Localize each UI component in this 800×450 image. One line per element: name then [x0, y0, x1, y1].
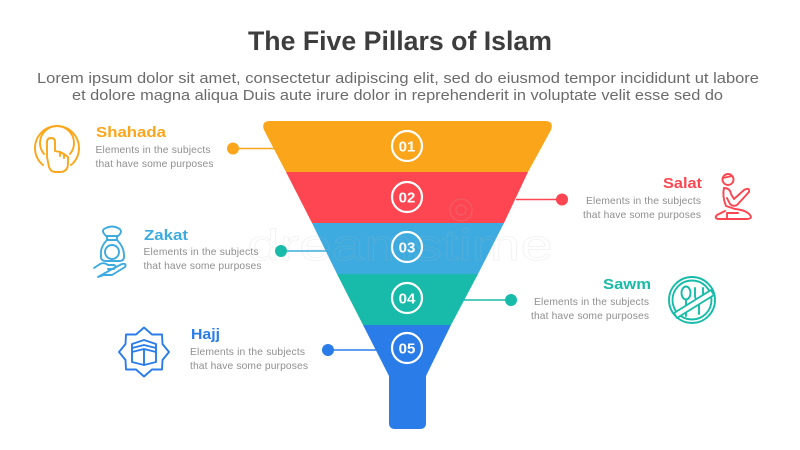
- watermark: dreamstime: [247, 221, 553, 270]
- number 03: 03: [399, 240, 415, 256]
- text: Sawm: Sawm: [603, 276, 651, 293]
- text: Shahada: Shahada: [96, 124, 167, 141]
- text: Sawm: [531, 276, 651, 322]
- funnel: [263, 121, 552, 429]
- number 02: [392, 182, 422, 212]
- connector: Sawm: [463, 294, 517, 306]
- funnel band 4: [337, 274, 478, 325]
- text: Hajj: [190, 326, 308, 372]
- text: Shahada: [96, 124, 214, 170]
- connector: Zakat: [275, 245, 326, 257]
- number 03: [392, 232, 422, 262]
- text: Shahada: Elements in the subjects: [96, 145, 210, 156]
- text: Zakat: that have some purposes: [144, 261, 262, 272]
- icon: Kaaba star: [119, 328, 169, 376]
- text: Hajj: Elements in the subjects: [190, 347, 305, 358]
- text: Hajj: Hajj: [191, 326, 220, 343]
- number 04: [392, 283, 422, 313]
- text: Salat: Salat: [663, 175, 702, 192]
- text: Shahada: that have some purposes: [96, 159, 214, 170]
- text: Sawm: Elements in the subjects: [534, 297, 649, 308]
- funnel band 5 and stem: [363, 325, 451, 429]
- number 05: [392, 333, 422, 363]
- text: Salat: Elements in the subjects: [586, 196, 701, 207]
- number 05: 05: [399, 340, 415, 358]
- text: Salat: [583, 175, 702, 221]
- icon: pointing hand: [35, 126, 79, 172]
- watermark: [247, 199, 553, 270]
- icon: no food: [669, 277, 715, 323]
- connector: Hajj: [322, 344, 376, 356]
- text: Zakat: [144, 227, 262, 272]
- text: Hajj: that have some purposes: [190, 361, 308, 372]
- text: Zakat: Elements in the subjects: [144, 247, 258, 258]
- title: The Five Pillars of Islam: [248, 26, 552, 56]
- icon: praying person: [716, 174, 751, 219]
- subtitle: et dolore magna aliqua Duis aute irure dolor in reprehenderit in voluptate velit esse sed do: [72, 88, 723, 104]
- text: Salat: that have some purposes: [583, 210, 701, 221]
- text: Zakat: Zakat: [144, 227, 188, 244]
- number 04: 04: [399, 290, 416, 308]
- connector: Salat: [516, 194, 568, 206]
- number 02: 02: [399, 190, 415, 206]
- text: Sawm: that have some purposes: [531, 311, 649, 322]
- icon: money bag in hand: [94, 226, 126, 277]
- funnel band 3: [312, 223, 504, 274]
- funnel band 1: [263, 121, 552, 172]
- number 01: [392, 131, 422, 161]
- funnel band 2: [286, 172, 528, 223]
- subtitle: [37, 71, 759, 104]
- connector: Shahada: [227, 142, 274, 154]
- number 01: 01: [399, 138, 415, 156]
- subtitle: Lorem ipsum dolor sit amet, consectetur adipiscing elit, sed do eiusmod tempor incididunt ut labore: [37, 71, 759, 87]
